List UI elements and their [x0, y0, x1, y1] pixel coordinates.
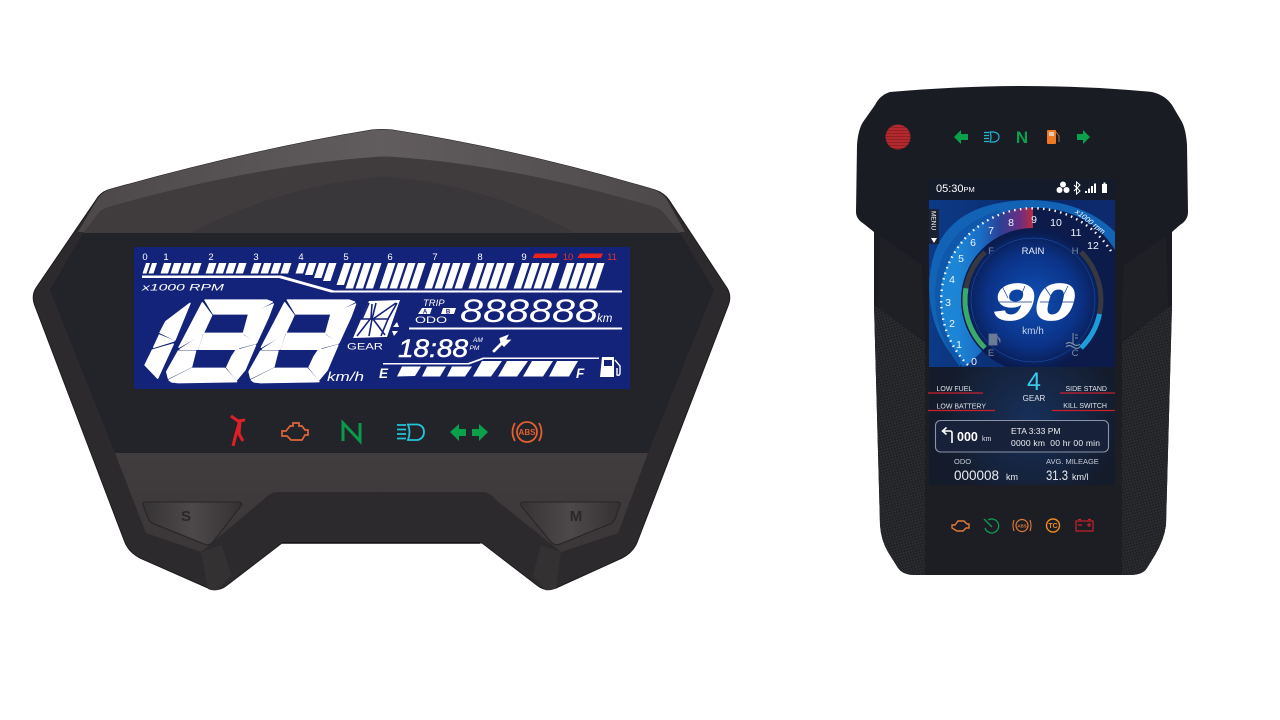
- dial labels: C: [1072, 348, 1079, 359]
- fuel gauge: F: [576, 366, 585, 381]
- button: S: [143, 502, 242, 545]
- dial labels: H: [1072, 246, 1079, 257]
- speed segment lines: [996, 286, 1074, 302]
- icon: fuel top: [1047, 130, 1059, 144]
- swoop fill left: [935, 210, 1000, 367]
- gear label: GEAR: [347, 342, 383, 352]
- lower plate: [115, 453, 648, 552]
- trip and odo labels: ODO: [415, 315, 447, 326]
- status bar: 05:30PM: [936, 183, 975, 195]
- trip and odo labels: [415, 298, 456, 326]
- rpm scale numbers: 1: [163, 252, 169, 263]
- odometer: 000008: [954, 468, 999, 483]
- warning underlines: [928, 393, 1115, 410]
- gear up/down marks: [392, 322, 399, 336]
- rpm scale numbers: 0: [142, 252, 148, 263]
- warning labels: LOW BATTERY: [936, 404, 986, 410]
- rpm numbers: 8: [1008, 217, 1014, 229]
- right dial background: [1033, 208, 1115, 367]
- fuel arc grey: [966, 252, 985, 288]
- warning labels: [936, 386, 1107, 410]
- rpm scale numbers: 7: [432, 252, 438, 263]
- icon: engine: [952, 521, 969, 531]
- status bar: [936, 182, 1107, 195]
- divider: [409, 328, 622, 330]
- dial face: [961, 228, 1105, 372]
- rpm tick dots: [941, 208, 1111, 365]
- icon: ABS: ABS: [1017, 524, 1027, 528]
- center lower body: [925, 485, 1122, 575]
- fuel gauge: E: [379, 366, 389, 381]
- trip and odo labels: B: [446, 310, 451, 316]
- right side panel: [1121, 236, 1168, 340]
- left side panel: [878, 236, 925, 340]
- menu tab: MENU: [930, 211, 936, 230]
- odometer: km: [1006, 472, 1018, 482]
- dial labels: RAIN: [1022, 246, 1044, 257]
- warning labels: KILL SWITCH: [1063, 403, 1107, 410]
- icon: fan: [1056, 182, 1070, 193]
- left grip texture: [874, 305, 925, 575]
- red zone bars: [532, 254, 603, 258]
- icon: left arrow top: [954, 130, 968, 144]
- rpm scale numbers: 2: [208, 252, 214, 263]
- icon: ABS: [512, 422, 542, 442]
- lower data area: [929, 367, 1115, 485]
- odometer digits: 888888: [460, 293, 598, 329]
- temperature arc blue: [1081, 314, 1100, 348]
- rpm unit: x1000 rpm: [1073, 207, 1107, 236]
- center recess edge: [282, 542, 480, 544]
- rpm numbers: 3: [945, 297, 951, 309]
- icon: ABS: [1013, 520, 1031, 532]
- warning labels: SIDE STAND: [1066, 386, 1107, 393]
- icon: headlight: [397, 424, 424, 440]
- gauge background: [929, 200, 1115, 367]
- fuel hose: [615, 360, 620, 375]
- icon: traction control: TC: [1048, 523, 1058, 530]
- speed readout segments: [145, 300, 356, 383]
- LCD screen: [134, 247, 630, 389]
- rpm numbers: 7: [988, 225, 994, 237]
- menu tab: [929, 209, 939, 244]
- navigation box: 000: [957, 430, 978, 444]
- icon: temperature: [1066, 333, 1080, 348]
- rpm scale numbers: 9: [521, 252, 527, 263]
- icon: bluetooth: [1074, 182, 1080, 194]
- rpm numbers: 4: [949, 274, 955, 286]
- am pm: [470, 337, 483, 352]
- rpm numbers: 12: [1087, 240, 1099, 252]
- icon: signal: [1086, 184, 1095, 193]
- rpm scale numbers: 8: [477, 252, 483, 263]
- icon: fuel small: [989, 334, 1000, 345]
- speed unit: km/h: [327, 369, 364, 384]
- lower-left facet: [201, 545, 231, 590]
- outer swoop band: [929, 200, 1115, 367]
- navigation box: 0000 km 00 hr 00 min: [1011, 438, 1100, 448]
- housing silhouette: [33, 130, 730, 590]
- average mileage: AVG. MILEAGE: [1046, 457, 1099, 466]
- TFT screen: [928, 179, 1115, 485]
- icon: traction control: [1046, 519, 1060, 532]
- top dome: [78, 130, 685, 232]
- odometer unit: km: [597, 313, 613, 325]
- rpm scale numbers: 10: [563, 252, 573, 263]
- rpm scale numbers: 11: [607, 252, 617, 263]
- icon: neutral top: N: [1016, 128, 1028, 147]
- rpm bar graph: [142, 263, 604, 288]
- rpm scale numbers: 5: [343, 252, 349, 263]
- fuel arc green: [965, 288, 985, 348]
- gear indicator: [353, 300, 400, 338]
- button: S: S: [181, 508, 191, 525]
- rpm sweep line: [142, 276, 622, 292]
- icon: side stand: [231, 416, 245, 446]
- am pm: AM: [472, 337, 483, 344]
- screen bezel: [50, 233, 714, 453]
- navigation box: km: [982, 436, 992, 443]
- dial labels: E: [988, 348, 994, 359]
- navigation box: [936, 420, 1108, 452]
- housing silhouette: [856, 86, 1188, 575]
- icon: right turn arrow: [472, 424, 488, 441]
- rpm numbers: 1: [956, 339, 962, 351]
- clock: 18:88: [398, 335, 468, 363]
- panel: TFT instrument cluster: [856, 86, 1188, 575]
- right grip texture: [1122, 305, 1172, 575]
- icon: speedometer: [984, 519, 999, 533]
- trip and odo labels: TRIP: [423, 298, 445, 309]
- rpm scale numbers: 4: [298, 252, 304, 263]
- button: M: [521, 502, 620, 545]
- rpm scale numbers: 3: [253, 252, 259, 263]
- lower-right facet: [533, 545, 561, 590]
- icon: wrench: [494, 337, 508, 351]
- icon: neutral: [343, 423, 360, 441]
- rpm numbers: 11: [1071, 227, 1082, 239]
- icon: left turn arrow: [450, 424, 466, 441]
- rpm scale numbers: 6: [387, 252, 393, 263]
- fuel gauge: [379, 357, 614, 381]
- rpm scale numbers: [142, 252, 617, 263]
- bottom warning icons: [952, 519, 1093, 533]
- rpm numbers: 10: [1050, 217, 1062, 229]
- rpm numbers: 9: [1031, 214, 1037, 226]
- dial labels: [988, 246, 1079, 359]
- rpm numbers: [945, 214, 1099, 368]
- rpm unit label: x1000 RPM: [140, 282, 224, 294]
- icon: turn arrow: [942, 428, 952, 443]
- rpm numbers: 0: [971, 356, 977, 368]
- average mileage: km/l: [1072, 472, 1088, 482]
- button: M: M: [570, 508, 582, 525]
- icon: battery: [1076, 520, 1093, 531]
- average mileage: [1046, 457, 1099, 483]
- warning labels: LOW FUEL: [936, 386, 972, 393]
- indicator lamp: red: [886, 124, 910, 150]
- panel: LCD instrument cluster: [33, 130, 730, 590]
- odometer: ODO: [954, 457, 971, 466]
- icon: ABS: ABS: [519, 428, 536, 437]
- trip and odo labels: A: [423, 310, 428, 316]
- gauge sweep band: [951, 218, 1033, 358]
- speed unit: km/h: [1022, 326, 1044, 337]
- rpm numbers: 2: [949, 318, 955, 330]
- rpm numbers: 5: [958, 253, 964, 265]
- inner dome shade: [190, 176, 575, 233]
- rpm numbers: 6: [970, 237, 976, 249]
- dial inner ring: [971, 238, 1095, 362]
- icon: battery: [1102, 182, 1107, 193]
- gear label: GEAR: [1023, 394, 1046, 403]
- gear value: 4: [1027, 368, 1041, 396]
- average mileage: 31.3: [1046, 468, 1068, 483]
- icon: headlight top: [984, 132, 999, 142]
- temperature arc grey: [1081, 252, 1101, 314]
- navigation box: ETA 3:33 PM: [1011, 426, 1060, 436]
- icon: engine check: [282, 423, 308, 440]
- icon: right arrow top: [1077, 130, 1090, 144]
- odometer: [954, 457, 1018, 483]
- speed value: 90: [993, 274, 1075, 332]
- icon: fuel pump: [600, 357, 614, 377]
- inner dome face: [83, 156, 680, 233]
- dial labels: F: [988, 246, 994, 257]
- warning icons row: [231, 416, 542, 446]
- am pm: PM: [470, 345, 480, 352]
